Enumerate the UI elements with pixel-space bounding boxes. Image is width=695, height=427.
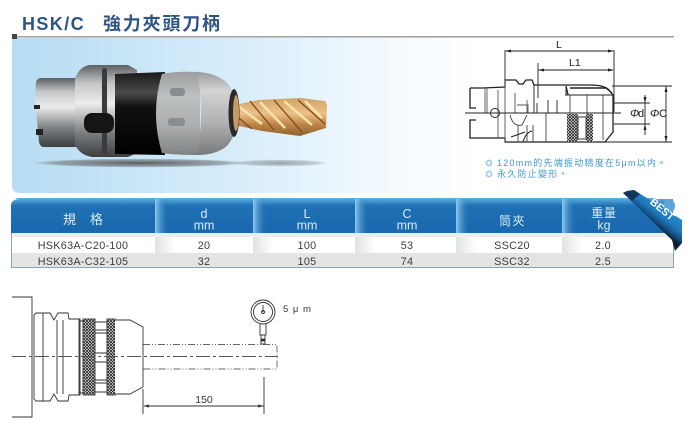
table header: mm	[297, 218, 317, 232]
projected bar	[143, 344, 277, 369]
table rows: 105	[298, 256, 316, 268]
dimension L1	[538, 57, 614, 98]
dimension L	[505, 39, 614, 112]
end mill	[230, 98, 327, 136]
rule above table	[16, 198, 656, 199]
table rows: 53	[401, 240, 413, 252]
table header: mm	[397, 218, 417, 232]
spindle outline	[12, 297, 32, 417]
title: HSK/C	[22, 14, 85, 34]
table rows: HSK63A-C20-100	[38, 240, 128, 252]
knurl bands	[567, 114, 578, 142]
table rows: 74	[401, 256, 413, 268]
table rows: SSC32	[494, 256, 530, 268]
table rows: 20	[198, 240, 210, 252]
photo panel background	[12, 38, 480, 193]
dimension L1: L1	[569, 57, 581, 69]
shank	[35, 78, 80, 147]
table header: d	[201, 207, 208, 221]
dimension C: Φ	[650, 108, 659, 120]
table header: C	[402, 207, 412, 221]
dimension 150: 150	[195, 394, 213, 406]
table header: 筒夾	[499, 214, 526, 228]
table rows: HSK63A-C32-105	[38, 256, 128, 268]
table header	[11, 199, 673, 233]
table header: L	[304, 207, 311, 221]
dimension d: Φ	[630, 108, 639, 120]
table rows: SSC20	[494, 240, 530, 252]
centre line	[12, 356, 278, 358]
technical drawing: holder dimensions	[465, 39, 672, 142]
black collar	[115, 72, 165, 155]
photo: HSK tool holder with end mill	[32, 65, 328, 168]
spec table	[11, 199, 674, 268]
dimension C	[605, 86, 672, 142]
table header: 規 格	[63, 212, 103, 227]
table rows	[11, 233, 674, 268]
silver nose	[197, 72, 238, 155]
knurled collar	[83, 319, 115, 395]
table rows: 32	[198, 256, 210, 268]
dimension d	[614, 95, 650, 135]
BEST ribbon	[623, 190, 682, 251]
holder outline	[470, 80, 613, 142]
knurled nut	[156, 72, 200, 155]
feature notes	[486, 157, 667, 179]
dial gauge	[251, 300, 312, 344]
table rows: 100	[298, 240, 316, 252]
table rows: 2.5	[595, 256, 611, 268]
table header: kg	[597, 218, 611, 232]
table rows: 2.0	[595, 240, 611, 252]
dimension C: C	[659, 108, 667, 120]
dimension d: d	[638, 108, 644, 120]
flange	[75, 65, 137, 157]
nose bore	[228, 89, 240, 137]
dimension L: L	[556, 39, 562, 51]
feature notes: 永久防止變形。	[497, 168, 569, 179]
table header: mm	[194, 218, 214, 232]
dimension 150	[143, 377, 264, 414]
runout diagram	[12, 297, 312, 417]
holder body	[34, 313, 83, 401]
dial gauge: 5 μ m	[283, 304, 312, 315]
title: 強力夾頭刀柄	[103, 14, 222, 34]
feature notes: 120mm的先端振动精度在5μm以内。	[497, 157, 667, 168]
tool shadow	[32, 158, 248, 168]
nose	[115, 320, 143, 394]
BEST ribbon: BEST	[647, 196, 677, 224]
header rule	[12, 34, 674, 39]
table header: 重量	[591, 206, 617, 220]
